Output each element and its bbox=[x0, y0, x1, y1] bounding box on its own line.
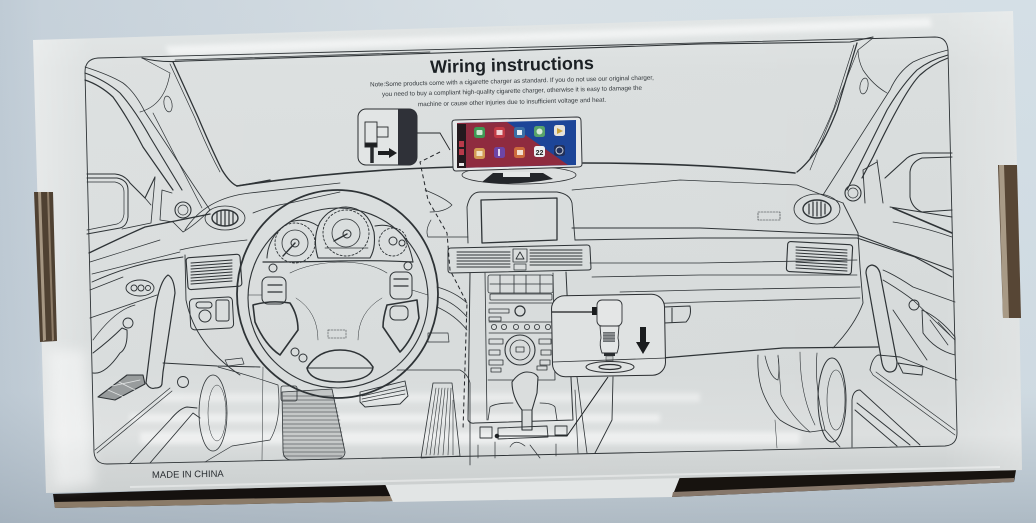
callout: power plug into device bbox=[358, 109, 417, 165]
device edge bbox=[398, 109, 417, 165]
center console bbox=[468, 272, 573, 423]
right side mirror bbox=[885, 153, 952, 237]
made in china label: MADE IN CHINA bbox=[152, 469, 224, 481]
gear shifter bbox=[478, 372, 567, 458]
note text bbox=[370, 75, 654, 108]
left slot bbox=[34, 192, 57, 342]
left footwell bbox=[199, 367, 279, 462]
box underside and flaps bbox=[53, 470, 1016, 508]
dashed wiring route bbox=[420, 152, 467, 430]
cup holder handle bbox=[664, 306, 690, 323]
floor mat pedal bbox=[281, 386, 345, 460]
right console side and footwell bbox=[575, 352, 920, 453]
air vent right round bbox=[794, 194, 840, 224]
air vent left round bbox=[205, 206, 245, 230]
steering wheel bbox=[237, 190, 438, 398]
left side mirror bbox=[87, 174, 191, 234]
windshield top bbox=[142, 37, 873, 62]
charger body bbox=[597, 300, 622, 353]
small dash label bbox=[758, 212, 780, 220]
panel frame: car interior drawing bbox=[85, 37, 957, 465]
note text: you need to buy a compliant high-quality cigarette charger, otherwise it is easy to damage the bbox=[382, 85, 643, 98]
screen bbox=[457, 120, 576, 168]
dashboard lines bbox=[89, 163, 952, 465]
left A-pillar bbox=[85, 58, 270, 210]
right slot bbox=[998, 165, 1021, 318]
cable bbox=[552, 311, 593, 313]
callout: cigarette charger bbox=[551, 294, 666, 377]
car display device with app icons bbox=[452, 117, 582, 184]
center screen hood bbox=[467, 192, 575, 243]
title: Wiring instructions bbox=[430, 53, 594, 77]
right rectangular vent bbox=[786, 241, 853, 275]
brake pedal bbox=[360, 381, 408, 407]
right door handle and controls bbox=[866, 265, 957, 435]
instrument gauges bbox=[267, 207, 413, 263]
left door controls bbox=[93, 275, 200, 463]
socket bbox=[553, 358, 666, 372]
center vents bbox=[448, 245, 591, 273]
right A-pillar bbox=[797, 38, 948, 203]
note text: machine or cause other injuries due to insufficient voltage and heat. bbox=[418, 97, 606, 108]
app icons: 22 bbox=[536, 150, 543, 157]
accelerator pedal bbox=[421, 383, 460, 458]
arrow down bbox=[636, 327, 650, 354]
arrow right bbox=[378, 148, 397, 158]
sidebar bbox=[457, 124, 466, 168]
left switch panel bbox=[189, 297, 234, 330]
plug connector bbox=[365, 122, 388, 163]
line from plug callout to device bbox=[417, 133, 450, 150]
note text: Note:Some products come with a cigarette charger as standard. If you do not use our original charger, bbox=[370, 75, 654, 88]
wire from console to charger callout bbox=[495, 377, 608, 438]
left rectangular vent bbox=[186, 254, 242, 290]
